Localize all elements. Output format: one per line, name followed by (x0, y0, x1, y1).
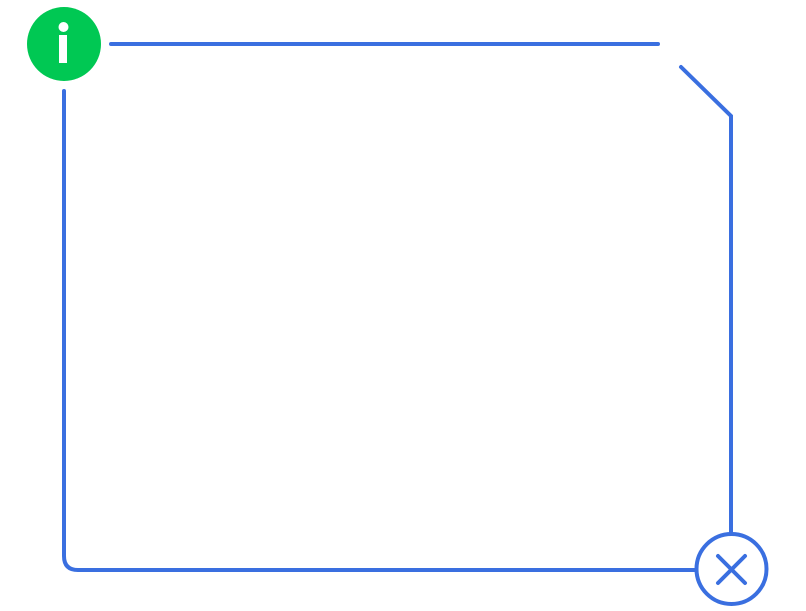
icon: info (27, 7, 101, 81)
frame outline (64, 44, 731, 570)
icon: close (696, 534, 766, 604)
